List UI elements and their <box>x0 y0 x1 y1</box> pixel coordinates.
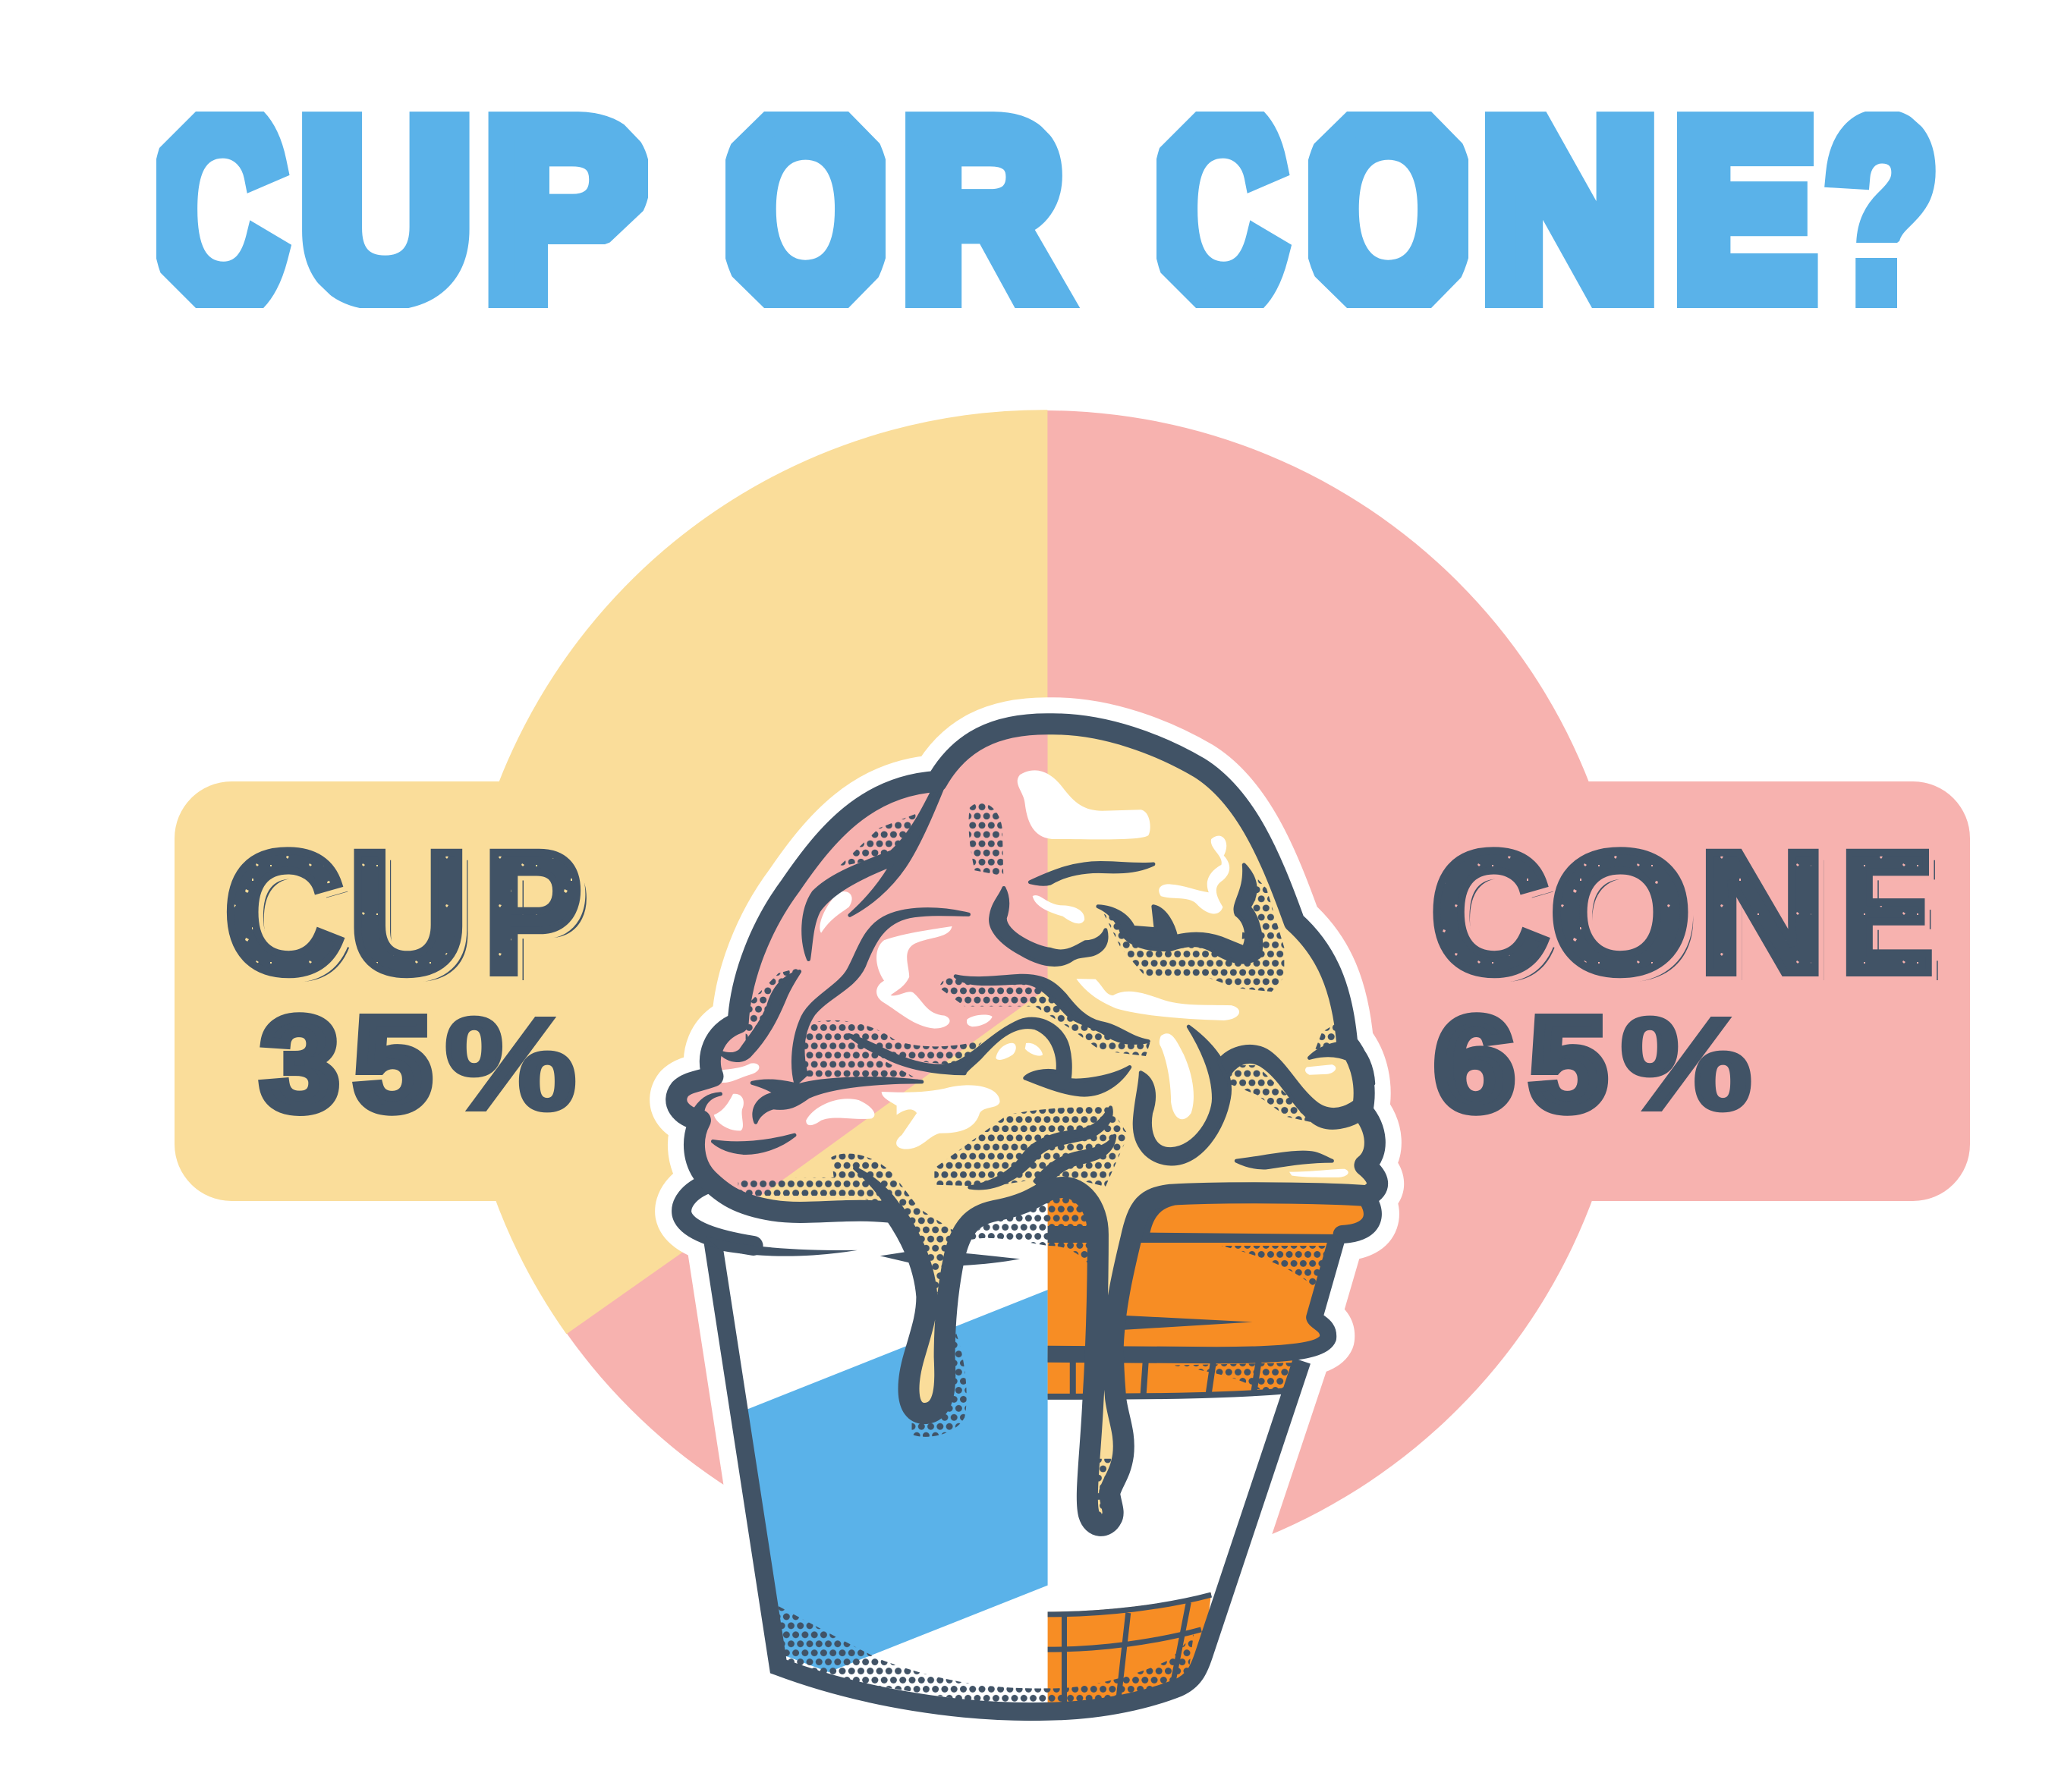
panel: cone band <box>1366 781 1970 1201</box>
title: U <box>301 72 470 347</box>
cone shadow halftone <box>1221 1246 1331 1287</box>
title: O <box>724 53 888 366</box>
cone label inset: N <box>1702 819 1831 1014</box>
wafer sleeve lower <box>1048 1354 1297 1397</box>
wafer bottom <box>1048 1593 1211 1712</box>
pie chart: 65% cone, 35% cup <box>459 410 1629 1580</box>
scoop outline <box>676 724 1377 1526</box>
cone label shadow: O <box>1558 822 1701 1017</box>
cone label face: O <box>1549 815 1691 1010</box>
white sticker halo <box>676 724 1377 1712</box>
cone rim band <box>1141 1195 1373 1234</box>
ice cream scoop <box>676 724 1377 1526</box>
cone label face: N <box>1698 815 1827 1010</box>
cup and cone base <box>681 1184 1373 1713</box>
upper orange left of drip <box>1048 1191 1096 1237</box>
cup label inset <box>228 819 587 1014</box>
cone body edge <box>1048 1234 1338 1355</box>
title: E <box>1675 72 1814 347</box>
cone percentage: 5 <box>1530 990 1606 1137</box>
highlights <box>714 770 1348 1177</box>
wafer sleeve halftone <box>1171 1363 1292 1391</box>
cup label shadow: C <box>233 822 354 1017</box>
cup percentage <box>261 990 577 1137</box>
drip shadow halftone <box>911 1323 967 1437</box>
scoop halftone shading <box>738 803 1339 1521</box>
cup label inset: U <box>351 819 473 1014</box>
cup label inset: C <box>228 819 349 1014</box>
cone label face: E <box>1839 815 1934 1010</box>
cone label inset: E <box>1844 819 1939 1014</box>
cone spike <box>1123 1316 1253 1330</box>
cup label inset: P <box>487 819 587 1014</box>
cup label face: C <box>224 815 345 1010</box>
cone percentage: % <box>1620 990 1752 1137</box>
cone percentage: 6 <box>1435 990 1515 1137</box>
cone body <box>1048 1234 1338 1355</box>
cup label shadow: U <box>357 822 478 1017</box>
cone label shadow: C <box>1439 822 1559 1017</box>
cone label face: C <box>1430 815 1550 1010</box>
cone label face <box>1430 815 1934 1010</box>
cone label inset <box>1434 819 1939 1014</box>
title: P <box>486 72 645 347</box>
right half white body <box>1048 1240 1337 1712</box>
title: O <box>1307 53 1471 366</box>
title: ? <box>1827 72 1936 347</box>
cone label inset: C <box>1434 819 1554 1014</box>
blue stripe <box>747 1290 1048 1672</box>
halftone between drips <box>970 1191 1093 1269</box>
cup percentage: 3 <box>261 990 338 1137</box>
cup bottom halftone <box>779 1606 1194 1702</box>
cup label shadow <box>233 822 592 1017</box>
panel: cup band <box>175 781 759 1201</box>
cone label shadow: E <box>1849 822 1943 1017</box>
cone label inset: O <box>1553 819 1696 1014</box>
calligraphic contour lines <box>693 777 1374 1218</box>
cup rim taper right <box>880 1250 1020 1265</box>
title: C <box>154 53 283 366</box>
wafer sleeve lines <box>1048 1357 1284 1397</box>
title: N <box>1482 72 1657 347</box>
cone percentage <box>1435 990 1752 1137</box>
title: R <box>903 72 1062 347</box>
title <box>156 112 1936 308</box>
cone rim outline <box>1141 1193 1373 1234</box>
cup label face: P <box>483 815 583 1010</box>
cup percentage: % <box>445 990 577 1137</box>
cup label face: U <box>348 815 469 1010</box>
strawberry area <box>687 734 1047 1197</box>
cup white body <box>688 1187 1048 1712</box>
title: C <box>1154 53 1283 366</box>
cone label shadow: N <box>1707 822 1836 1017</box>
cup label <box>224 815 592 1017</box>
cup label shadow: P <box>492 822 592 1017</box>
cone label <box>1430 815 1943 1017</box>
cup outline <box>713 1242 1302 1712</box>
cone label shadow <box>1439 822 1943 1017</box>
cup percentage: 5 <box>354 990 431 1137</box>
illustration: half cup half cone ice cream <box>676 724 1377 1713</box>
wafer grid <box>1048 1595 1211 1710</box>
vanilla base <box>676 724 1377 1526</box>
cup label face <box>224 815 583 1010</box>
cup rim outline <box>681 1184 754 1246</box>
cup rim taper left <box>706 1237 858 1256</box>
